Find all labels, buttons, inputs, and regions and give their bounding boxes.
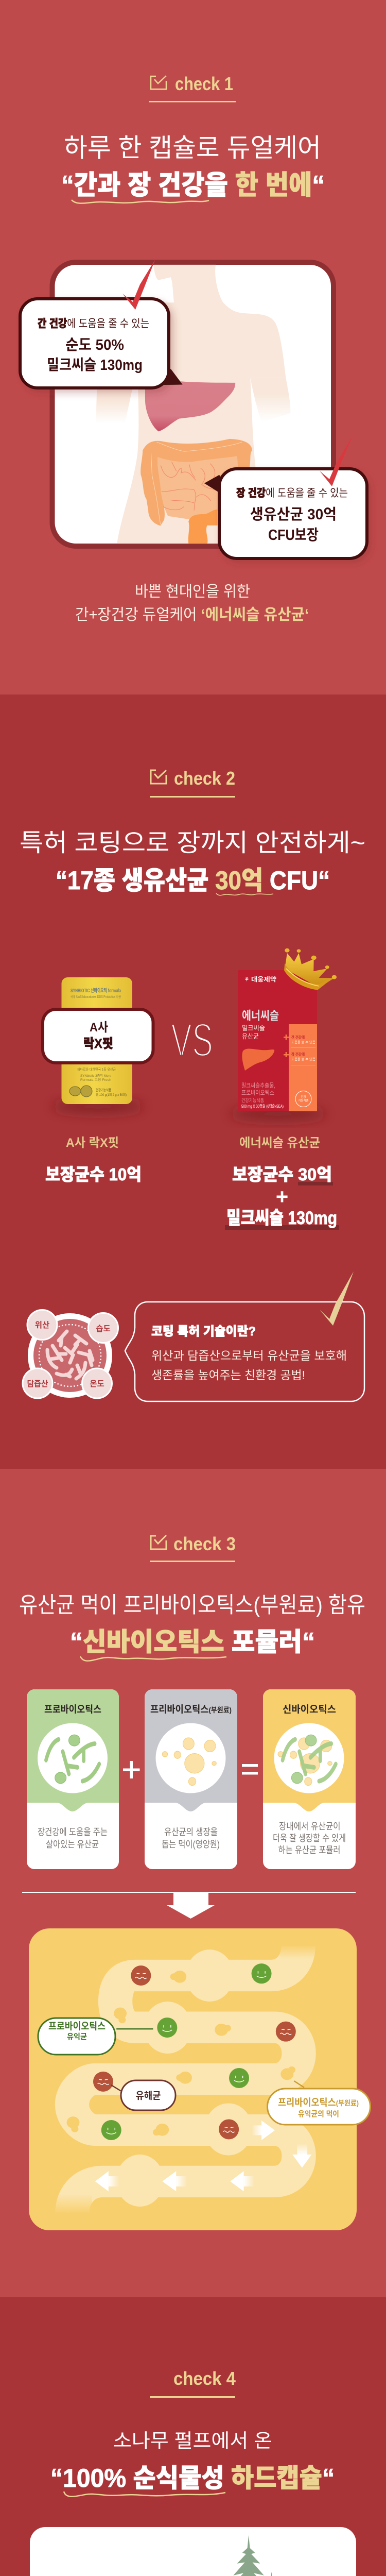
heading: hard capsule: “100% 순식물성 하드캡슐“	[50, 2464, 335, 2493]
faces: harmful bacteria	[93, 1965, 296, 2139]
product: competitor can: 국내 UAS laboratories DDS Probiotics 사용	[71, 994, 121, 999]
body illustration frame	[52, 262, 334, 546]
faces: beneficial bacteria	[101, 1963, 272, 2140]
callout: gut health: 장 건강에 도움을 줄 수 있는	[236, 487, 348, 499]
heading: 17 strains: 특허 코팅으로 장까지 안전하게~	[20, 829, 365, 857]
label: competitor name: 락X핏	[83, 1037, 113, 1051]
panel: check 3	[19, 1533, 371, 2230]
caption: dual care: 바쁜 현대인을 위한	[135, 583, 250, 600]
check 4 badge: check 4	[173, 2368, 236, 2389]
product: competitor can: SYNbiotic 3중막 More	[80, 1074, 112, 1078]
microbes and nutrients	[278, 1735, 336, 1785]
icon: box liver	[242, 1048, 274, 1071]
card: synbiotics	[263, 1689, 356, 1869]
product: competitor can: Formula 코팅 Fresh	[80, 1078, 111, 1082]
panel: check 1	[20, 73, 367, 623]
product: 에너씨슬 box: 밀크씨슬추출물,	[241, 1082, 275, 1089]
label: prebiotics: 유익균의 먹이	[298, 2110, 339, 2119]
check 1 badge	[149, 73, 236, 102]
label: probiotics: 유익균	[67, 2032, 87, 2041]
label: probiotics: 프로바이오틱스	[48, 2021, 106, 2032]
heading: dual care	[61, 133, 325, 204]
heading: synbiotics	[19, 1593, 365, 1661]
comparison: 에너씨슬: +	[276, 1184, 288, 1209]
bubble: 담즙산	[23, 1368, 52, 1398]
product: 에너씨슬 box: 500 mg X 30캡슐 (6캡슐x5EA)	[241, 1104, 284, 1109]
product: competitor can: SYNBIOTIC 신바이오틱 formula	[71, 987, 121, 994]
product: competitor can: 까다로운 대한민국 1등 유산균	[77, 1067, 116, 1072]
callout: coating patent: 생존률을 높여주는 친환경 공법!	[151, 1368, 305, 1382]
product: 에너씨슬 box: 밀크씨슬	[242, 1024, 265, 1032]
product: 에너씨슬 box: 장 건강에	[291, 1052, 305, 1057]
product: competitor can: 총 100 g(1회 2 g x 50회)	[96, 1093, 127, 1097]
product: 에너씨슬 box: 에너씨슬	[242, 1009, 279, 1022]
card: prebiotics: 프리바이오틱스(부원료)	[150, 1704, 232, 1715]
bubble: 온도: 온도	[90, 1380, 104, 1388]
card: probiotics	[27, 1689, 119, 1869]
bubble: 습도	[89, 1313, 118, 1343]
product: 에너씨슬 box: 건강기능식품	[241, 1098, 264, 1103]
callout: liver health: 간 건강에 도움을 줄 수 있는	[38, 318, 149, 330]
product: 에너씨슬 box: 건강	[301, 1095, 306, 1099]
callout: liver health	[20, 260, 183, 388]
check 3 badge	[150, 1533, 236, 1562]
product: 에너씨슬 box: 프로바이오틱스	[241, 1089, 274, 1096]
label: probiotics	[38, 2018, 115, 2055]
card: synbiotics: 하는 유산균 포뮬러	[278, 1845, 341, 1855]
card: prebiotics: 유산균의 생장을	[164, 1827, 218, 1837]
product: 에너씨슬 box: 유산균	[242, 1032, 259, 1040]
bubble: 위산	[27, 1310, 57, 1340]
heading: hard capsule	[50, 2430, 335, 2497]
operator: equals	[242, 1764, 258, 1774]
panel: gut journey	[29, 1928, 371, 2230]
callout: coating patent	[125, 1272, 364, 1401]
microbes: green	[46, 1735, 99, 1784]
label: VS: VS	[171, 1014, 213, 1066]
product: 에너씨슬 box: 기능식품	[298, 1098, 309, 1103]
panel: check 4	[30, 2368, 356, 2576]
comparison: 에너씨슬: 밀크씨슬 130mg	[226, 1208, 337, 1228]
operator: plus	[123, 1761, 140, 1778]
illustration: intestine path	[54, 1945, 317, 2214]
comparison: competitor	[45, 1136, 142, 1184]
callout: gut health	[204, 435, 367, 558]
check 2 badge	[150, 768, 235, 798]
callout: liver health: 순도 50%	[65, 337, 124, 353]
product: 에너씨슬 box: ⚘	[244, 976, 250, 983]
callout: gut health: 생유산균 30억	[250, 506, 337, 523]
label: harmful bacteria	[121, 2080, 176, 2110]
callout: liver health: 밀크씨슬 130mg	[47, 357, 143, 374]
comparison: 에너씨슬: 에너씨슬 유산균	[239, 1136, 320, 1150]
callout: gut health: CFU보장	[268, 527, 319, 544]
nutrients: yellow	[162, 1738, 216, 1785]
icon: crown	[284, 948, 337, 990]
comparison: 에너씨슬: 보장균수 30억	[232, 1165, 332, 1184]
heading: hard capsule: 소나무 펄프에서 온	[113, 2430, 272, 2451]
bubble: 위산: 위산	[35, 1320, 49, 1330]
product: 에너씨슬 box: 도움을 줄 수 있음	[291, 1057, 315, 1061]
card: prebiotics	[145, 1689, 237, 1869]
bubble: 담즙산: 담즙산	[27, 1379, 48, 1388]
icon: red check	[320, 435, 353, 486]
heading: 17 strains: “17종 생유산균 30억 CFU“	[56, 866, 330, 895]
caption: dual care: 간+장건강 듀얼케어 ‘에너씨슬 유산균‘	[75, 606, 309, 623]
label: prebiotics	[268, 2089, 371, 2125]
comparison: competitor: A사 락X핏	[66, 1136, 119, 1150]
heading: synbiotics: “신바이오틱스 포뮬러“	[70, 1628, 315, 1656]
callout: coating patent: 위산과 담즙산으로부터 유산균을 보호해	[151, 1349, 347, 1362]
icon: red check	[122, 260, 155, 310]
heading: 17 strains	[20, 829, 365, 895]
bubble: 온도	[82, 1368, 112, 1398]
product: 에너씨슬 box	[238, 970, 317, 1111]
comparison: competitor: 보장균수 10억	[45, 1165, 142, 1184]
direction arrows	[95, 2121, 311, 2191]
check 1 badge: check 1	[175, 73, 233, 94]
icon: gold check	[320, 1272, 354, 1326]
card: synbiotics: 장내에서 유산균이	[279, 1821, 341, 1832]
card: probiotics: 프로바이오틱스	[44, 1704, 101, 1715]
product: 에너씨슬 box: 도움을 줄 수 있음	[291, 1040, 315, 1044]
label: harmful bacteria: 유해균	[136, 2090, 161, 2102]
label: prebiotics: 프리바이오틱스(부원료)	[278, 2097, 359, 2108]
check 4 badge	[150, 2368, 236, 2398]
check 2 badge: check 2	[174, 768, 235, 789]
product: competitor can	[62, 977, 132, 1104]
card: synbiotics: 더욱 잘 생장할 수 있게	[273, 1833, 346, 1843]
product: 에너씨슬 box: 대웅제약	[251, 975, 276, 983]
background spruce trees	[200, 2535, 301, 2576]
card: prebiotics: 돕는 먹이(영양원)	[162, 1839, 220, 1850]
illustration: torso, liver and intestines	[96, 265, 290, 544]
caption: dual care	[75, 583, 309, 623]
heading: dual care: 하루 한 캡슐로 듀얼케어	[64, 133, 321, 162]
heading: dual care: “간과 장 건강을 한 번에“	[61, 171, 325, 200]
bacteria cluster	[47, 1331, 93, 1379]
card: probiotics: 장건강에 도움을 주는	[38, 1827, 108, 1837]
panel: check 2	[20, 768, 365, 1401]
callout: coating patent: 코팅 특허 기술이란?	[151, 1325, 256, 1338]
card: synbiotics: 신바이오틱스	[283, 1704, 336, 1715]
diagram: coating protection	[23, 1310, 118, 1398]
card: probiotics: 살아있는 유산균	[46, 1839, 99, 1850]
nutrient blobs	[67, 1971, 295, 2136]
product: competitor can: 건강기능식품	[96, 1088, 111, 1092]
comparison: 에너씨슬	[225, 1136, 339, 1230]
label: competitor name: A사	[90, 1021, 108, 1035]
arrow: down to gut	[22, 1892, 356, 1919]
bubble: 습도: 습도	[96, 1324, 111, 1333]
label: competitor name	[43, 1009, 153, 1063]
illustration: forest in capsule	[30, 2527, 356, 2576]
product: 에너씨슬 box: 간 건강에	[291, 1035, 305, 1040]
product shadows	[51, 1099, 327, 1121]
check 3 badge: check 3	[173, 1533, 236, 1554]
